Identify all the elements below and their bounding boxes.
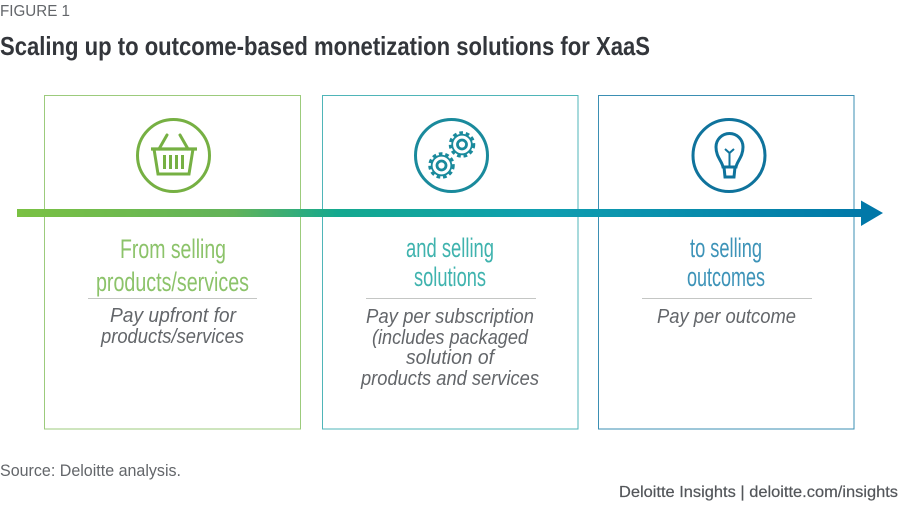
- icon: light bulb: [693, 120, 765, 192]
- heading: to selling outcomes: outcomes: [687, 262, 765, 292]
- description: pay per subscription: [360, 306, 539, 390]
- description: pay per subscription: Pay per subscription: [366, 306, 534, 328]
- description: pay per subscription: solution of: [406, 347, 496, 369]
- source note: Source: Deloitte analysis.: [0, 462, 181, 480]
- heading: and selling solutions: [406, 233, 494, 292]
- gear lower: [430, 154, 453, 177]
- description: pay per subscription: (includes packaged: [372, 327, 529, 349]
- description: pay upfront: products/services: [100, 326, 244, 348]
- description: pay upfront: [100, 305, 244, 348]
- heading: from selling products/services: From selling: [120, 234, 226, 264]
- description: pay upfront: Pay upfront for: [110, 305, 237, 327]
- title: Scaling up to outcome-based monetization solutions for XaaS: [0, 31, 650, 61]
- heading: to selling outcomes: [687, 233, 765, 292]
- heading: and selling solutions: solutions: [414, 262, 486, 292]
- description: pay per subscription: products and services: [360, 368, 539, 390]
- panel: selling outcomes: [598, 96, 854, 429]
- panel: selling solutions: [322, 96, 578, 429]
- heading: to selling outcomes: to selling: [690, 233, 762, 263]
- figure label: FIGURE 1: [0, 3, 70, 20]
- icon: gears: [416, 120, 488, 192]
- description: pay per outcome: Pay per outcome: [657, 306, 796, 328]
- heading: from selling products/services: products/services: [96, 267, 249, 297]
- heading: from selling products/services: [96, 234, 249, 297]
- gear upper: [450, 133, 474, 156]
- credit: Deloitte Insights | deloitte.com/insights: [619, 484, 898, 501]
- arrow: progression timeline: [17, 200, 883, 226]
- panel: selling products: [44, 96, 300, 429]
- heading: and selling solutions: and selling: [406, 233, 494, 263]
- icon: basket: [138, 120, 210, 192]
